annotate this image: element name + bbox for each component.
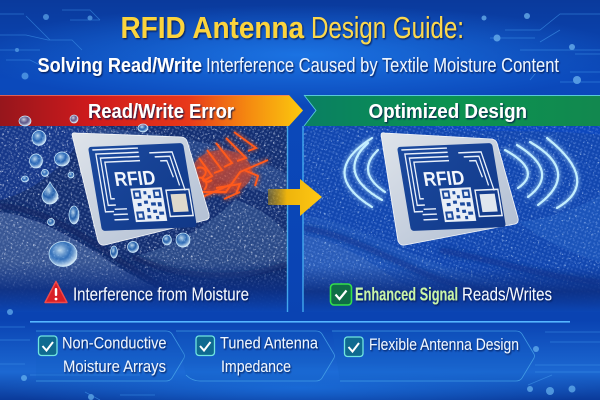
panel: optimized design fabric — [303, 125, 600, 312]
banner: optimized design — [304, 95, 600, 126]
icon: check box — [38, 336, 57, 356]
title: Design Guide: — [311, 10, 464, 45]
icon: right RFID tag: RFID — [422, 168, 466, 191]
icon: right RFID tag — [381, 133, 518, 245]
icon: check box — [344, 337, 363, 356]
banner: read/write error — [0, 95, 303, 126]
icon: signal waves left — [344, 138, 385, 207]
feature chip: flexible antenna design — [332, 331, 534, 381]
panel: read/write error fabric — [0, 126, 288, 312]
caption: enhanced signal: Enhanced Signal — [355, 284, 458, 304]
subtitle: Solving Read/Write — [38, 55, 202, 77]
icon: check box — [196, 336, 214, 356]
icon: signal waves right — [505, 138, 577, 208]
feature chip: tuned antenna impedance: Impedance — [221, 357, 291, 376]
feature chip: tuned antenna impedance — [176, 331, 334, 381]
feature chip: tuned antenna impedance: Tuned Antenna — [220, 334, 318, 352]
arrow: read error to optimized design — [268, 179, 322, 216]
caption: interference from moisture: Interference from Moisture — [73, 284, 249, 304]
glowing divider — [30, 321, 570, 323]
icon: warning triangle — [45, 282, 67, 302]
feature chip: non-conductive moisture arrays — [36, 331, 184, 381]
circuit pattern: top left — [0, 10, 100, 80]
title: RFID Antenna — [120, 10, 305, 45]
feature chip: non-conductive moisture arrays: Moisture Arrays — [63, 357, 166, 376]
banner: read/write error: Read/Write Error — [88, 101, 234, 123]
panel frames — [288, 126, 303, 312]
interference pattern — [192, 132, 268, 199]
water droplets — [19, 115, 190, 266]
icon: left RFID tag: RFID — [113, 168, 157, 191]
banner: optimized design: Optimized Design — [368, 101, 527, 123]
title — [120, 10, 464, 45]
caption: enhanced signal — [330, 284, 552, 305]
icon: green check — [330, 284, 352, 305]
circuit pattern: bottom — [0, 309, 600, 400]
caption: enhanced signal: Reads/Writes — [462, 284, 552, 304]
feature chip: non-conductive moisture arrays: Non-Conductive — [62, 334, 166, 352]
circuit pattern: top right — [482, 13, 600, 84]
subtitle — [38, 55, 559, 77]
icon: left RFID tag — [72, 133, 209, 245]
caption: interference from moisture — [45, 282, 249, 304]
feature chip: flexible antenna design: Flexible Antenna Design — [369, 335, 519, 354]
